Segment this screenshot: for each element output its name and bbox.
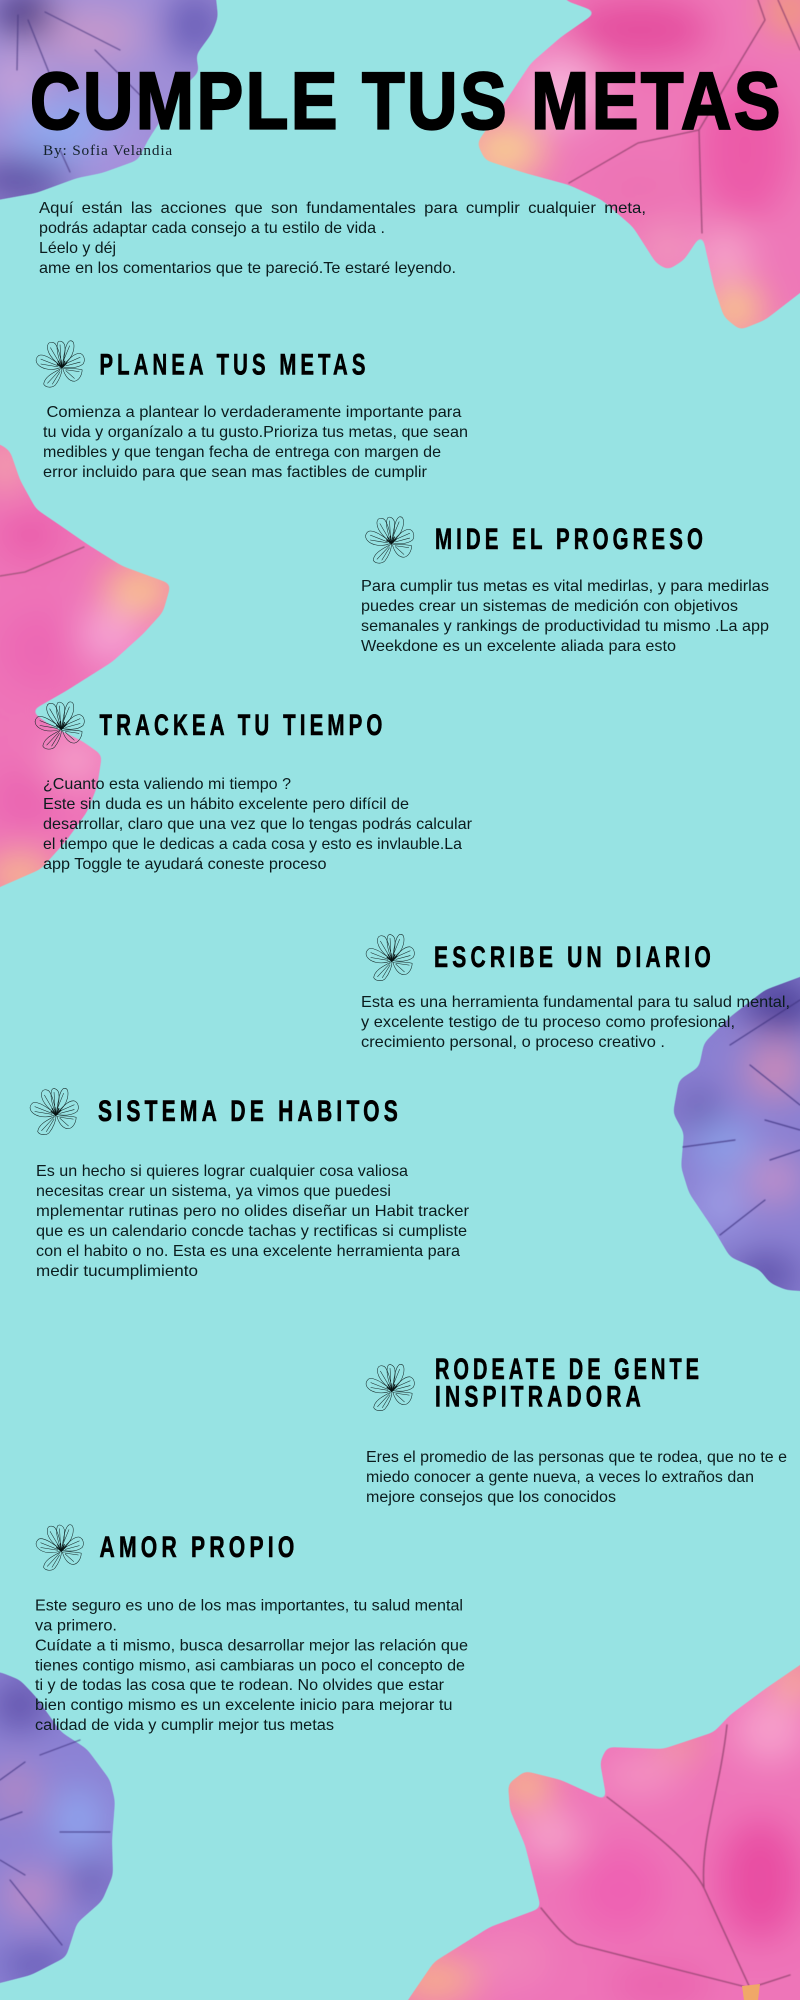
icon: flower bbox=[30, 1088, 78, 1135]
body text bbox=[36, 1163, 470, 1280]
section: mide el progreso bbox=[361, 517, 769, 655]
flower: right purple bbox=[674, 976, 800, 1292]
section: planea tus metas bbox=[36, 341, 468, 481]
icon: flower bbox=[366, 1364, 414, 1411]
heading: INSPITRADORA bbox=[435, 1381, 645, 1414]
heading: PLANEA TUS METAS bbox=[100, 349, 370, 382]
icon: flower bbox=[366, 517, 414, 563]
body text: ti y de todas las cosa que te rodean. No olvides que estar bbox=[35, 1677, 444, 1694]
body text: miedo conocer a gente nueva, a veces lo extraños dan bbox=[366, 1469, 754, 1486]
body text bbox=[43, 404, 468, 481]
body text: Eres el promedio de las personas que te rodea, que no te e bbox=[366, 1449, 787, 1466]
body text: semanales y rankings de productividad tu mismo .La app bbox=[361, 618, 769, 635]
section: sistema de habitos bbox=[30, 1088, 470, 1280]
intro text: ame en los comentarios que te pareció.Te estaré leyendo. bbox=[39, 260, 456, 277]
body text: Es un hecho si quieres lograr cualquier cosa valiosa bbox=[36, 1163, 408, 1180]
body text: que es un calendario concde tachas y rectificas si cumpliste bbox=[36, 1223, 467, 1240]
heading: AMOR PROPIO bbox=[100, 1531, 298, 1564]
body text: Este sin duda es un hábito excelente pero difícil de bbox=[43, 796, 409, 813]
icon: flower bbox=[36, 341, 84, 387]
body text: con el habito o no. Esta es una excelente herramienta para bbox=[36, 1243, 460, 1260]
body text bbox=[43, 776, 473, 873]
intro text: Aquí están las acciones que son fundamentales para cumplir cualquier meta, bbox=[39, 200, 646, 217]
body text: desarrollar, claro que una vez que lo tengas podrás calcular bbox=[43, 816, 473, 833]
body text: bien contigo mismo es un excelente inicio para mejorar tu bbox=[35, 1697, 452, 1714]
icon: flower bbox=[366, 934, 414, 981]
body text: ¿Cuanto esta valiendo mi tiempo ? bbox=[43, 776, 291, 793]
body text bbox=[361, 994, 790, 1051]
body text: mplementar rutinas pero no olides diseñar un Habit tracker bbox=[36, 1203, 470, 1220]
body text: necesitas crear un sistema, ya vimos que puedesi bbox=[36, 1183, 391, 1200]
body text: el tiempo que le dedicas a cada cosa y esto es invlauble.La bbox=[43, 836, 462, 853]
body text bbox=[35, 1598, 468, 1734]
body text: Cuídate a ti mismo, busca desarrollar mejor las relación que bbox=[35, 1638, 468, 1654]
section: trackea tu tiempo bbox=[35, 702, 473, 873]
body text: tienes contigo mismo, asi cambiaras un poco el concepto de bbox=[35, 1657, 465, 1674]
intro text: Léelo y déj bbox=[39, 240, 116, 257]
body text: y excelente testigo de tu proceso como profesional, bbox=[361, 1014, 735, 1031]
body text: medir tucumplimiento bbox=[36, 1263, 198, 1280]
body text: app Toggle te ayudará coneste proceso bbox=[43, 856, 327, 873]
intro text: podrás adaptar cada consejo a tu estilo de vida . bbox=[39, 220, 385, 237]
body text: crecimiento personal, o proceso creativo . bbox=[361, 1034, 665, 1051]
heading: TRACKEA TU TIEMPO bbox=[100, 709, 386, 742]
flower: bottom-right pink bbox=[408, 1664, 800, 2000]
body text: Esta es una herramienta fundamental para tu salud mental, bbox=[361, 994, 790, 1011]
body text: tu vida y organízalo a tu gusto.Prioriza tus metas, que sean bbox=[43, 424, 468, 441]
flower: top-right pink bbox=[478, 0, 800, 329]
icon: flower bbox=[36, 1525, 83, 1570]
body text: Weekdone es un excelente aliada para esto bbox=[361, 638, 676, 655]
byline: By: Sofia Velandia bbox=[43, 143, 173, 159]
icon: flower bbox=[35, 702, 84, 749]
heading bbox=[435, 1353, 703, 1414]
body text bbox=[366, 1449, 787, 1506]
body text: error incluido para que sean mas factibles de cumplir bbox=[43, 464, 428, 481]
body text: mejore consejos que los conocidos bbox=[366, 1489, 616, 1506]
heading: SISTEMA DE HABITOS bbox=[98, 1095, 402, 1128]
section: rodeate de gente inspitradora bbox=[366, 1353, 787, 1506]
body text: va primero. bbox=[35, 1618, 117, 1634]
body text: calidad de vida y cumplir mejor tus metas bbox=[35, 1717, 334, 1734]
flower: top-left purple bbox=[0, 0, 230, 210]
body text: Este seguro es uno de los mas importantes, tu salud mental bbox=[35, 1598, 463, 1614]
body text: Comienza a plantear lo verdaderamente importante para bbox=[46, 404, 462, 421]
flower: bottom-left purple bbox=[0, 1672, 115, 1984]
body text: Para cumplir tus metas es vital medirlas, y para medirlas bbox=[361, 578, 769, 595]
section: escribe un diario bbox=[361, 934, 790, 1051]
body text bbox=[361, 578, 769, 655]
body text: puedes crear un sistemas de medición con objetivos bbox=[361, 598, 738, 615]
section: amor propio bbox=[35, 1525, 468, 1734]
intro text bbox=[39, 200, 646, 277]
body text: medibles y que tengan fecha de entrega con margen de bbox=[43, 444, 441, 461]
flower: left pink bbox=[0, 444, 170, 888]
